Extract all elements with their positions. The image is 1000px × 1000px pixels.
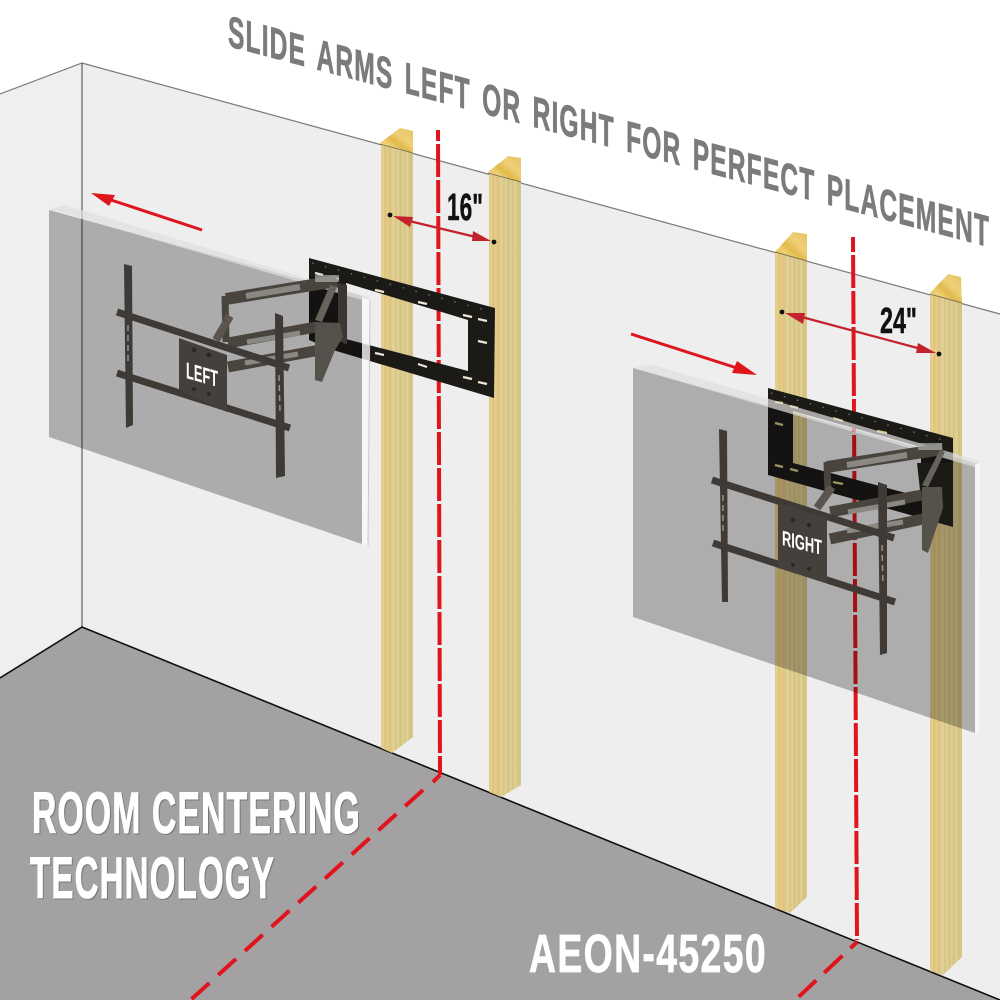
stud 1: [380, 128, 413, 753]
arrow: slide left: [91, 193, 202, 230]
dimension arrow: 16 inch: [388, 213, 496, 244]
heading: technology: TECHNOLOGY: [30, 846, 275, 911]
TV left (translucent): [49, 205, 372, 546]
arrow: slide right: [631, 334, 757, 375]
label: RIGHT: RIGHT: [782, 526, 822, 560]
wall bracket right: [768, 388, 953, 527]
heading: room centering: ROOM CENTERING: [32, 781, 361, 846]
stud 2: [488, 156, 521, 797]
label: 16 inches: 16": [447, 187, 483, 229]
label: 24 inches: 24": [880, 300, 917, 341]
wall bracket left: [309, 258, 495, 398]
stud 4: [930, 274, 962, 975]
floor: [0, 627, 1000, 1000]
mount arm right: [712, 429, 953, 655]
center line right: [790, 237, 857, 1000]
mount arm left: [117, 264, 347, 478]
arm assembly left: [216, 275, 347, 382]
TV right (translucent): [633, 364, 980, 735]
model number: AEON-45250: [529, 924, 767, 984]
label: LEFT: LEFT: [186, 357, 218, 392]
arm assembly right: [817, 443, 953, 553]
dimension arrow: 24 inch: [780, 310, 941, 356]
center line left: [185, 130, 440, 1000]
stud 3: [775, 232, 807, 913]
